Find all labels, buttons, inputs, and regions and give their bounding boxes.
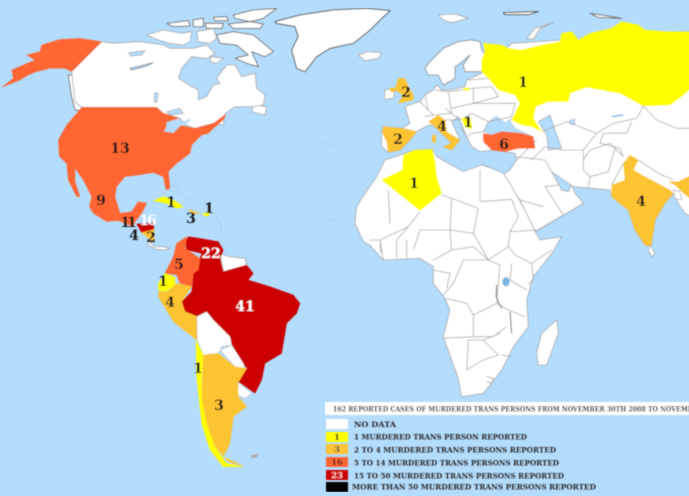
Argentina (202, 353, 247, 466)
Bangladesh (673, 190, 682, 200)
country case counts (96, 75, 646, 414)
legend title (325, 402, 689, 415)
country case counts: 13 (110, 141, 130, 157)
legend: 1 murdered: 1 MURDERED TRANS PERSON REPORTED (354, 432, 527, 442)
country case counts: 1 (463, 115, 473, 131)
Lake Balkhash (612, 115, 623, 117)
legend: no data: NO DATA (354, 420, 397, 429)
country case counts: 1 (204, 201, 214, 217)
legend: 5 to 14 murdered: 5 TO 14 MURDERED TRANS PERSONS REPORTED (354, 458, 559, 468)
country case counts: 9 (96, 193, 106, 209)
Colombia (165, 237, 200, 287)
Puerto Rico (203, 213, 209, 216)
country case counts: 16 (139, 213, 156, 229)
Myanmar (668, 175, 689, 200)
legend: more than 50 murdered: MORE THAN 50 MURDERED TRANS PERSONS REPORTED (352, 482, 596, 492)
Russia (482, 22, 689, 132)
Venezuela (185, 237, 223, 262)
Italy (428, 115, 460, 150)
Aral Sea (569, 118, 575, 125)
country case counts: 4 (636, 194, 646, 210)
Bolivia (197, 312, 232, 355)
country case counts: 2 (401, 85, 411, 101)
country case counts: 41 (235, 299, 255, 315)
Madagascar (537, 320, 558, 365)
Arctic islands and Greenland (68, 8, 390, 115)
Eurasia land (382, 30, 689, 247)
Dominican Republic (188, 209, 200, 213)
Sri Lanka (648, 245, 655, 257)
country case counts: 4 (165, 295, 175, 311)
South America (158, 237, 300, 467)
Chile (196, 340, 243, 467)
country case counts: 1 (158, 274, 168, 290)
Spain (382, 127, 417, 152)
Algeria (382, 149, 442, 211)
country case counts: 2 (146, 230, 156, 246)
Lithuania (463, 88, 469, 90)
Lake Victoria (502, 277, 510, 286)
Black Sea (483, 116, 533, 137)
legend: 15 to 50 murdered: 23 (331, 471, 343, 481)
country case counts: 2 (393, 132, 403, 148)
Northern Ireland (390, 88, 395, 92)
legend: 2 to 4 murdered (326, 444, 556, 455)
Peru (158, 283, 197, 340)
legend: 2 to 4 murdered: 3 (334, 445, 340, 455)
country case counts: 5 (174, 257, 184, 273)
Falkland Islands (251, 454, 258, 458)
Cuba (153, 197, 183, 208)
legend: 2 to 4 murdered: 2 TO 4 MURDERED TRANS PERSONS REPORTED (354, 446, 556, 454)
Costa Rica and Panama (147, 241, 170, 250)
Serbia (462, 117, 472, 129)
United Kingdom (395, 78, 413, 103)
Rift lakes (496, 285, 512, 333)
Paraguay (220, 345, 245, 372)
Brazil (182, 258, 300, 393)
country case counts: 1 (409, 176, 419, 192)
Honduras (137, 223, 154, 233)
Turkey (483, 132, 535, 152)
Scandinavia (425, 40, 487, 85)
Africa detail (370, 170, 655, 383)
country case counts: 11 (120, 215, 136, 231)
USA and Mexico (58, 107, 226, 227)
Great Lakes (165, 119, 190, 132)
Caribbean small islands (173, 142, 337, 233)
Ireland (384, 88, 395, 99)
Asian borders (517, 106, 689, 232)
Ecuador (158, 273, 175, 292)
legend: 15 to 50 murdered: 15 TO 50 MURDERED TRANS PERSONS REPORTED (354, 472, 564, 480)
legend: 1 murdered (326, 432, 527, 443)
Arctic Eurasian islands (438, 12, 622, 39)
legend: no data (326, 419, 397, 429)
legend: 1 murdered: 1 (334, 433, 340, 443)
Canada (72, 42, 265, 128)
Guianas (220, 253, 247, 272)
Uruguay (238, 383, 252, 398)
African borders (370, 170, 552, 383)
India (612, 155, 673, 247)
country case counts: 6 (499, 137, 509, 153)
North America (2, 8, 390, 250)
Canadian lakes (128, 51, 183, 115)
European borders (402, 72, 515, 137)
Iceland (358, 52, 382, 61)
Caspian Sea (538, 115, 562, 150)
country case counts: 4 (437, 119, 447, 135)
legend (325, 402, 689, 492)
Alaska (2, 38, 102, 87)
Nicaragua (142, 229, 154, 242)
Africa land (355, 149, 562, 397)
legend: 5 to 14 murdered: 16 (331, 458, 343, 468)
country case counts: 3 (214, 398, 224, 414)
country case counts: 22 (201, 246, 221, 262)
country case counts: 1 (193, 361, 203, 377)
Eurasia and Africa (355, 12, 689, 397)
country case counts: 1 (166, 195, 176, 211)
country case counts: 3 (186, 211, 196, 227)
country case counts: 1 (518, 75, 528, 91)
country case counts: 4 (129, 228, 139, 244)
